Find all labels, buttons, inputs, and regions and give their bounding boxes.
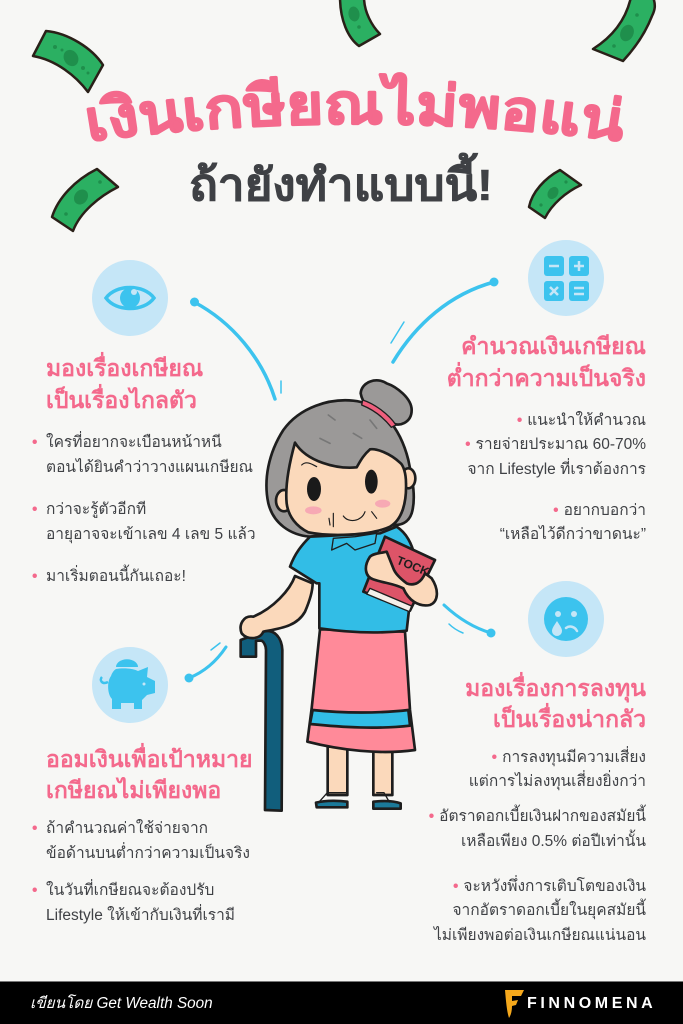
heading: มองเรื่องการลงทุน (465, 675, 646, 701)
icon: calculator (528, 240, 604, 316)
left arm (241, 576, 313, 638)
panel: underestimated retirement money (447, 240, 646, 543)
bullet text line 2: แต่การไม่ลงทุนเสี่ยงยิ่งกว่า (469, 773, 646, 790)
heading line 2: เป็นเรื่องน่ากลัว (493, 706, 646, 732)
money bill: top right (592, 0, 656, 62)
heading line 2: ต่ำกว่าความเป็นจริง (447, 365, 646, 391)
bullet text: ในวันที่เกษียณจะต้องปรับ (46, 882, 214, 899)
skirt (307, 629, 415, 752)
panel: savings not enough: • (32, 820, 37, 837)
logo: Finnomena F mark (505, 990, 524, 1018)
bullet text: • การลงทุนมีความเสี่ยง (492, 749, 646, 766)
skirt stripe (310, 710, 410, 728)
arrow: lower left curve (184, 642, 228, 682)
heading line 2: เกษียณไม่เพียงพอ (46, 777, 221, 803)
bullet text: • อัตราดอกเบี้ยเงินฝากของสมัยนี้ (429, 808, 646, 825)
hair tie (362, 400, 396, 427)
panel: far from self (32, 260, 256, 585)
money bill: top left (32, 30, 104, 94)
ears (276, 490, 292, 511)
bullet text: มาเริ่มตอนนี้กันเถอะ! (46, 568, 186, 585)
panel: far from self: • (32, 501, 37, 518)
panel: far from self: • (32, 568, 37, 585)
bullet text: ถ้าคำนวณค่าใช้จ่ายจาก (46, 820, 208, 837)
collar (332, 533, 377, 550)
panel: savings not enough (32, 647, 253, 924)
cheeks (305, 500, 390, 514)
cane (241, 631, 282, 811)
heading: มองเรื่องเกษียณ (46, 355, 203, 381)
bullet text line 2: Lifestyle ให้เข้ากับเงินที่เรามี (46, 907, 235, 924)
bullet text line 2: • รายจ่ายประมาณ 60-70% (465, 436, 646, 453)
arm holding book (366, 552, 437, 605)
bullet text: • แนะนำให้คำนวณ (517, 412, 646, 429)
sandals (316, 801, 401, 809)
panel: far from self: • (32, 434, 37, 451)
logo wordmark: FINNOMENA (527, 995, 656, 1012)
right ear (401, 468, 415, 488)
icon: piggy bank (92, 647, 168, 723)
bullet text line 2: จากอัตราดอกเบี้ยในยุคสมัยนี้ (452, 902, 646, 919)
hair streaks (320, 415, 393, 460)
face (286, 443, 406, 535)
illustration: grandmother with cane and book (239, 379, 438, 812)
bullet text line 3: ไม่เพียงพอต่อเงินเกษียณแน่นอน (434, 927, 646, 944)
arrow: top right curve (390, 278, 498, 364)
footer bar (0, 981, 683, 1024)
book label: TOCK (395, 553, 432, 579)
book (363, 537, 435, 611)
hair bun (361, 380, 412, 425)
money bill: lower right (528, 168, 582, 220)
icon: eye (92, 260, 168, 336)
bullet text: ใครที่อยากจะเบือนหน้าหนี (46, 434, 222, 451)
legs (328, 747, 392, 795)
bullet text line 2: “เหลือไว้ดีกว่าขาดนะ” (500, 526, 646, 543)
arrow: lower right curve (442, 603, 496, 638)
smile and wrinkles (302, 463, 377, 527)
money bill: lower left (50, 168, 120, 232)
panel: savings not enough: • (32, 882, 37, 899)
subtitle: ถ้ายังทำแบบนี้! (189, 161, 493, 210)
arrow: top left curve (190, 298, 282, 401)
title: main pink arc heading: เงินเกษียณไม่พอแน่ (86, 72, 623, 142)
icon: crying face (528, 581, 604, 657)
bullet text line 2: ตอนได้ยินคำว่าวางแผนเกษียณ (46, 459, 253, 476)
hair back (266, 400, 414, 537)
heading line 2: เป็นเรื่องไกลตัว (46, 387, 197, 413)
heading: คำนวณเงินเกษียณ (461, 333, 646, 359)
sandal straps (319, 793, 389, 802)
bullet text: • จะหวังพึ่งการเติบโตของเงิน (453, 878, 646, 895)
bullet text: กว่าจะรู้ตัวอีกที (46, 501, 146, 518)
money bill: top centre (338, 0, 382, 48)
eyes (307, 470, 378, 501)
bullet text line 2: เหลือเพียง 0.5% ต่อปีเท่านั้น (461, 833, 646, 850)
byline: เขียนโดย Get Wealth Soon (30, 995, 213, 1012)
book pages (367, 588, 412, 612)
shirt (290, 527, 415, 632)
bullet text line 3: จาก Lifestyle ที่เราต้องการ (467, 461, 646, 478)
bullet text: • อยากบอกว่า (553, 502, 646, 519)
panel: investing is scary (429, 581, 646, 944)
bullet text line 2: อายุอาจจะเข้าเลข 4 เลข 5 แล้ว (46, 526, 256, 543)
heading: ออมเงินเพื่อเป้าหมาย (46, 746, 253, 772)
bullet text line 2: ข้อด้านบนต่ำกว่าความเป็นจริง (46, 845, 250, 862)
